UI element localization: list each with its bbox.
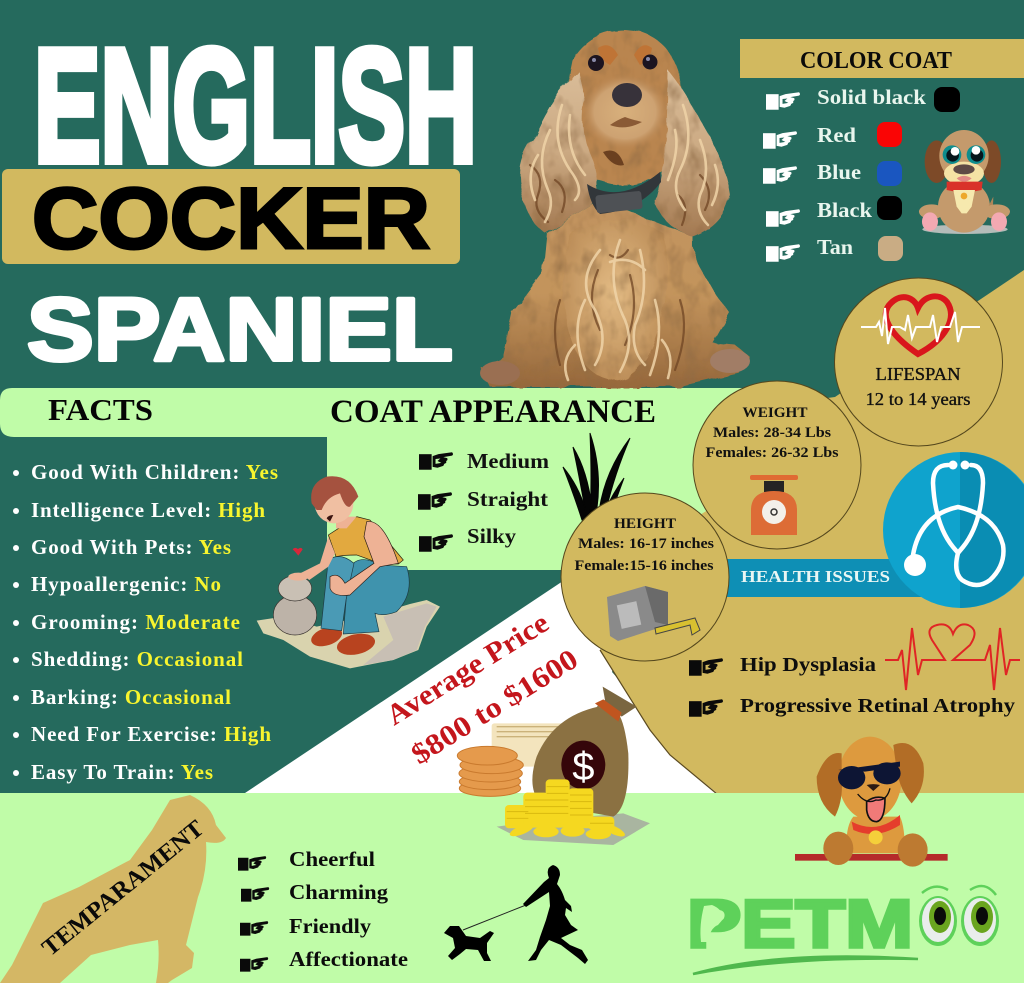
- icon: kitchen scale: [750, 475, 798, 535]
- bag shadow: [497, 813, 650, 845]
- item: tan: [766, 235, 903, 262]
- circle: height: [561, 493, 729, 661]
- height text: [574, 516, 714, 574]
- facts list: Good With Pets: Yes: [31, 535, 231, 559]
- leash: [463, 905, 526, 930]
- height text: Males: 16-17 inches: [578, 536, 714, 552]
- neck shadow: [603, 151, 624, 165]
- title word: Cocker: COCKER: [32, 171, 430, 267]
- facts bullets: [13, 470, 19, 776]
- eyes: [588, 54, 658, 71]
- coat list: Silky: [467, 524, 517, 548]
- fur highlights: [531, 105, 718, 380]
- logo letters: PETM: [687, 886, 913, 962]
- panel: facts: [13, 392, 278, 784]
- walking dog: [444, 926, 494, 961]
- dog silhouette: [0, 795, 226, 983]
- dog chest mane: [563, 220, 667, 380]
- gold panel outline: [600, 650, 717, 794]
- issue: progressive retinal atrophy: Progressive Retinal Atrophy: [740, 695, 1016, 717]
- issue: hip dysplasia: Hip Dysplasia: [740, 654, 876, 676]
- facts heading: FACTS: [48, 392, 153, 427]
- title: [2, 16, 477, 379]
- icon: heart with pulse: [861, 296, 980, 354]
- dog body: [480, 200, 750, 387]
- logo dog head: [700, 905, 724, 942]
- average price text: Average Price: [381, 607, 555, 732]
- gold health panel: [600, 270, 1024, 793]
- icon: money bag and coins: $: [572, 745, 594, 789]
- title word: English: ENGLISH: [34, 16, 477, 196]
- weight text: WEIGHT: [742, 405, 808, 421]
- money bag: [532, 707, 628, 817]
- orange coin stack: [457, 746, 523, 796]
- item: red: Red: [817, 123, 856, 147]
- issue: hip dysplasia: [689, 654, 876, 676]
- fur dark strands: [530, 165, 709, 370]
- coat list: Straight: [467, 487, 548, 511]
- gold coin stacks: [505, 779, 626, 839]
- color coat banner: [740, 39, 1024, 78]
- facts list: Shedding: Occasional: [31, 647, 243, 671]
- logo swoosh: [693, 957, 918, 974]
- coat list: [418, 449, 550, 552]
- temperament list: Charming: [289, 880, 389, 904]
- health issues banner: [725, 559, 930, 597]
- icon: cool dog with sunglasses: [795, 737, 948, 867]
- facts list: Need For Exercise: High: [31, 722, 271, 746]
- facts list: Hypoallergenic: No: [31, 572, 221, 596]
- item: tan: Tan: [817, 235, 853, 259]
- brow marks: [598, 45, 652, 65]
- item: black: Black: [817, 198, 872, 222]
- facts list: Intelligence Level: High: [31, 498, 265, 522]
- item: blue: [763, 160, 902, 186]
- bag neck: [597, 687, 637, 717]
- dollar badge: [561, 741, 605, 789]
- item: red: [763, 122, 902, 149]
- title word: Spaniel: SPANIEL: [27, 279, 453, 379]
- left ear: [519, 70, 596, 233]
- coat appearance heading: COAT APPEARANCE: [330, 394, 656, 430]
- cash stack: [492, 723, 565, 767]
- facts list: Good With Children: Yes: [31, 460, 278, 484]
- gold title box: [2, 169, 460, 264]
- mouth: [610, 117, 642, 127]
- logo: petmoo: [687, 886, 999, 974]
- facts list: [31, 460, 278, 784]
- panel: coat appearance: [330, 394, 656, 552]
- item: blue: Blue: [817, 160, 861, 184]
- facts list: Barking: Occasional: [31, 685, 231, 709]
- icon: stethoscope: [883, 452, 1024, 608]
- weight text: Males: 28-34 Lbs: [713, 425, 831, 441]
- weight text: Females: 26-32 Lbs: [706, 445, 839, 461]
- circle: weight: [693, 381, 861, 549]
- illustration: woman walking dog: [444, 865, 588, 964]
- light green facts tab and coat band: [0, 388, 770, 570]
- health issues label: HEALTH ISSUES: [741, 567, 890, 586]
- temperament list: Cheerful: [289, 847, 375, 871]
- dog head: [567, 30, 683, 185]
- icon: money bag and coins: [457, 687, 650, 845]
- item: solid black: Solid black: [817, 85, 926, 109]
- height text: Female:15-16 inches: [574, 558, 714, 574]
- panel: health issues list: [689, 624, 1020, 717]
- item: solid black: [766, 85, 960, 112]
- icon: tape measure: [607, 586, 700, 641]
- temperament list: [238, 847, 408, 972]
- lifespan value: 12 to 14 years: [866, 389, 970, 409]
- icon: red pulse heart: [885, 624, 1020, 690]
- height text: HEIGHT: [614, 516, 676, 532]
- collar: [587, 172, 661, 214]
- nose: [612, 83, 642, 107]
- weight text: [706, 405, 839, 461]
- right ear: [656, 70, 730, 237]
- panel: color coat: [740, 39, 1024, 262]
- muzzle: [581, 74, 669, 150]
- temperament list: Affectionate: [289, 947, 408, 971]
- average price text: [381, 607, 584, 771]
- logo eyes: [919, 886, 999, 946]
- circle: lifespan: [834, 278, 1002, 446]
- item: black: [766, 196, 902, 227]
- color coat heading: COLOR COAT: [800, 48, 952, 74]
- woman: [523, 865, 588, 964]
- collar buckle: [595, 191, 643, 213]
- left paw: [480, 361, 520, 385]
- icon: cartoon puppy: [919, 130, 1010, 234]
- illustration: child petting cat: [257, 476, 440, 668]
- dog photo: [480, 30, 750, 387]
- icon: grass plant: [563, 433, 630, 520]
- coat list: Medium: [467, 449, 550, 473]
- lifespan label: LIFESPAN: [876, 364, 960, 384]
- average price text: $800 to $1600: [406, 643, 584, 771]
- panel: temperament: [0, 795, 408, 983]
- temperament heading: TEMPARAMENT: [37, 816, 209, 962]
- temperament list: Friendly: [289, 914, 372, 938]
- facts list: Grooming: Moderate: [31, 610, 240, 634]
- white price wedge: [245, 575, 720, 793]
- right paw: [710, 349, 750, 373]
- light green bottom panel: [0, 793, 1024, 983]
- facts list: Easy To Train: Yes: [31, 760, 213, 784]
